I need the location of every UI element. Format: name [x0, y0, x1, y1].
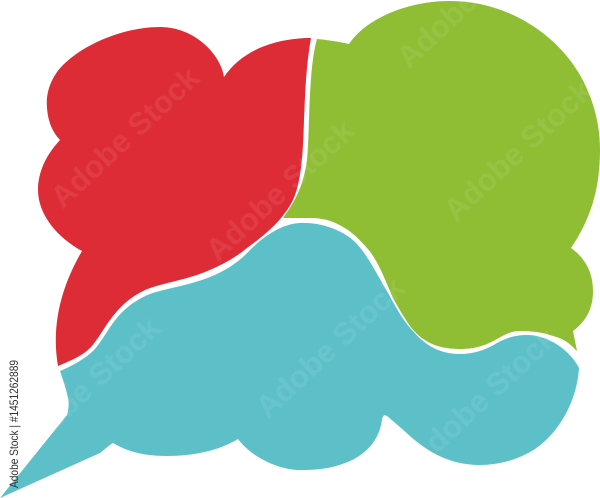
- watermark text overlays: Adobe Stock: [5, 309, 168, 465]
- watermark text overlays: Adobe Stock: [199, 112, 362, 268]
- green speech bubble: [283, 1, 600, 351]
- red speech bubble: [38, 27, 311, 366]
- watermark text overlays: Adobe Stock: [44, 59, 207, 215]
- watermark text overlays: Adobe Stock: [437, 72, 600, 228]
- watermark text overlays: Adobe Stock: [249, 269, 412, 425]
- watermark text overlays: Adobe Stock: [402, 319, 565, 475]
- teal speech bubble with tail: [0, 223, 579, 498]
- vertical stock id caption: Adobe Stock | #1451262889: [7, 360, 21, 488]
